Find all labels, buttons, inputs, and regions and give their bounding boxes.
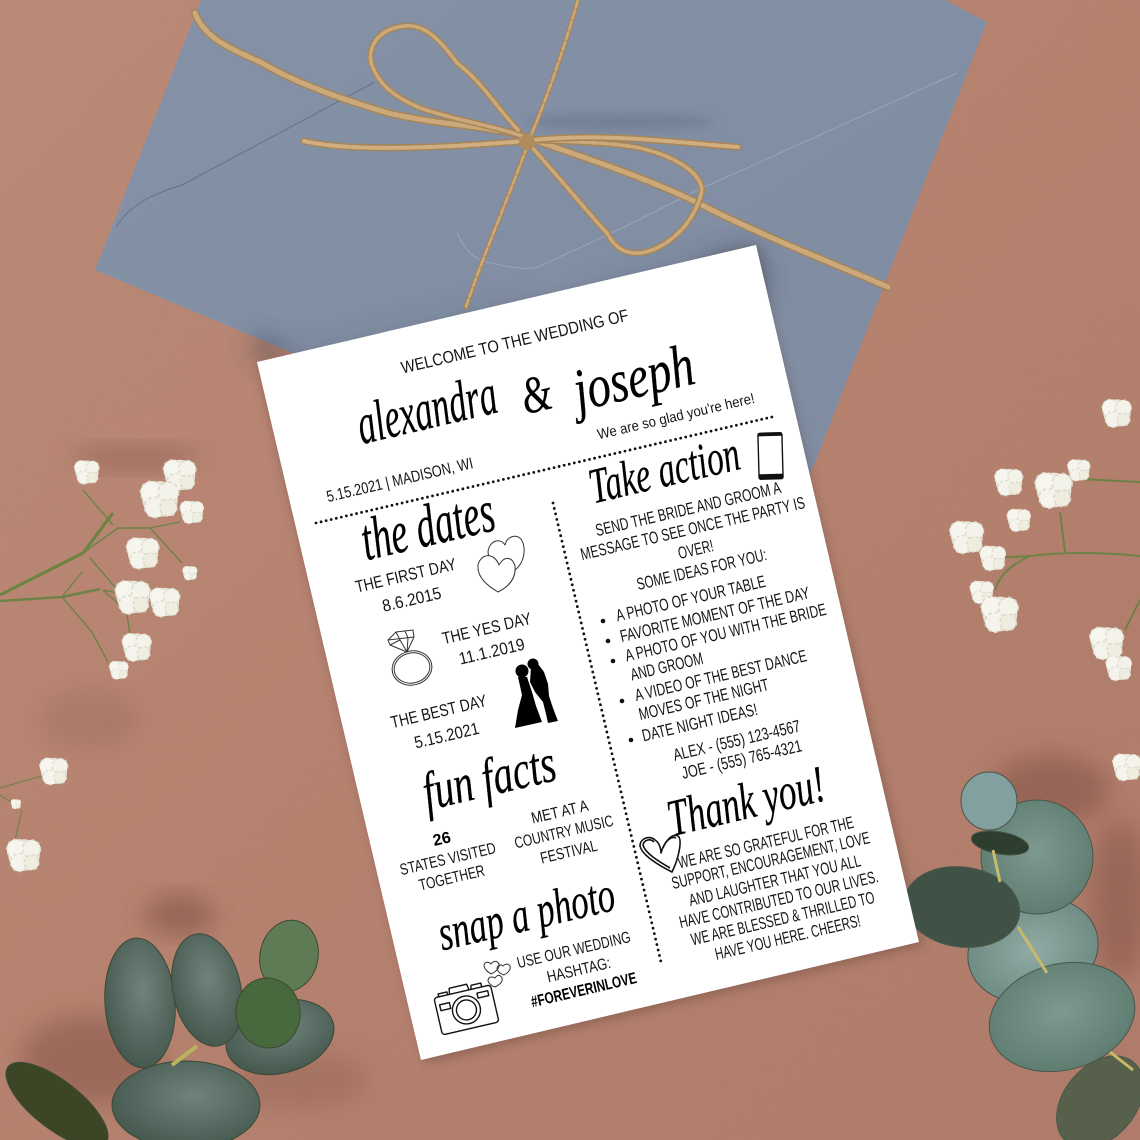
text: yes day: 11.1.2019 [457, 635, 527, 669]
text: best day: THE BEST DAY [389, 691, 489, 732]
list: ideas [601, 572, 828, 745]
text: thanks message [670, 813, 880, 964]
text: thanks message: HAVE YOU HERE. CHEERS! [713, 911, 862, 964]
left eucalyptus [0, 915, 342, 1140]
list: ideas: A VIDEO OF THE BEST DANCE [633, 646, 809, 705]
text: contacts: ALEX - (555) 123-4567 [671, 717, 802, 765]
text: first day [353, 555, 458, 616]
text: instructions: SOME IDEAS FOR YOU: [635, 545, 769, 594]
left baby's breath sprigs [0, 460, 204, 872]
twine: vertical [466, 0, 578, 307]
list: ideas: A PHOTO OF YOUR TABLE [614, 572, 767, 625]
envelope [95, 0, 987, 600]
text: date and location: 5.15.2021 | MADISON, WI [325, 455, 475, 506]
text: first day: THE FIRST DAY [353, 555, 458, 597]
text: instructions: OVER! [676, 536, 715, 563]
list: ideas: DATE NIGHT IDEAS! [640, 700, 759, 745]
heading: names: & [515, 364, 558, 426]
icon: two hearts [478, 536, 524, 592]
text: instructions: MESSAGE TO SEE ONCE THE PARTY IS [579, 493, 807, 564]
text: hashtag: USE OUR WEDDING [516, 929, 632, 972]
flower clusters [7, 460, 204, 872]
text: thanks message: WE ARE BLESSED & THRILLED TO [689, 888, 876, 949]
panel: program card [257, 245, 919, 1060]
icon: kissing couple silhouette [515, 658, 558, 728]
text: best day: 5.15.2021 [412, 719, 481, 752]
twine: knot [519, 134, 535, 150]
text: states visited: 26 [431, 829, 453, 850]
card shadow [257, 249, 924, 1064]
twine: left loop [371, 26, 522, 136]
text: instructions [579, 478, 807, 594]
text: contacts: JOE - (555) 765-4321 [680, 736, 804, 783]
section: snap a photo [432, 866, 639, 1035]
list: ideas: AND GROOM [629, 649, 705, 684]
heading: the dates: the dates [354, 478, 501, 573]
text: thanks message: AND LAUGHTER THAT YOU ALL [687, 851, 863, 910]
text: states visited: TOGETHER [417, 863, 487, 895]
text: thanks message: HAVE CONTRIBUTED TO OUR LIVES. [677, 867, 880, 932]
icon: small hearts [484, 961, 510, 987]
icon: camera [433, 979, 499, 1035]
text: hashtag: #FOREVERINLOVE [529, 970, 639, 1011]
text: met at festival: COUNTRY MUSIC [513, 813, 615, 852]
divider: horizontal dotted line [316, 416, 776, 523]
heading: names [350, 331, 700, 457]
heading: names: joseph [561, 331, 700, 425]
text: met at festival [513, 798, 615, 868]
text: glad you're here: We are so glad you're here! [596, 391, 756, 443]
text: best day [389, 691, 489, 752]
list: ideas: MOVES OF THE NIGHT [637, 675, 771, 724]
heading: take action: Take action [583, 425, 745, 514]
icon: diamond ring [388, 630, 435, 689]
section: the dates [353, 478, 558, 752]
twine bow [195, 0, 888, 307]
text: met at festival: MET AT A [530, 798, 590, 828]
section: take action [579, 425, 828, 783]
heading: snap a photo: snap a photo [432, 866, 620, 961]
twine: bow ends [304, 137, 738, 148]
text: thanks message: SUPPORT, ENCOURAGEMENT, LOVE [670, 828, 872, 893]
sprig stems [990, 478, 1140, 630]
flower clusters [950, 399, 1140, 781]
right baby's breath sprigs [950, 399, 1140, 781]
text: contacts [671, 717, 804, 783]
section: thank you [640, 756, 880, 964]
list: ideas: A PHOTO OF YOU WITH THE BRIDE [623, 600, 828, 665]
text: yes day [440, 609, 533, 669]
text: first day: 8.6.2015 [380, 584, 443, 616]
text: hashtag: HASHTAG: [545, 955, 613, 986]
sprig stems [0, 490, 182, 855]
twine: right loop [530, 140, 702, 253]
text: states visited: STATES VISITED [398, 840, 498, 879]
icon: phone [758, 433, 783, 479]
section: fun facts [398, 733, 615, 895]
list: ideas: FAVORITE MOMENT OF THE DAY [618, 583, 811, 646]
text: met at festival: FESTIVAL [539, 838, 599, 868]
divider: vertical dotted line [553, 503, 661, 962]
text: instructions: SEND THE BRIDE AND GROOM A [594, 478, 783, 540]
text: hashtag [516, 929, 639, 1011]
text: yes day: THE YES DAY [440, 609, 533, 648]
heading: welcome: WELCOME TO THE WEDDING OF [399, 306, 630, 377]
icon: sketched heart [640, 835, 680, 872]
text: states visited [398, 829, 498, 895]
heading: names: alexandra [350, 361, 503, 457]
heading: fun facts: fun facts [416, 733, 561, 822]
text: thanks message: WE ARE SO GRATEFUL FOR THE [676, 813, 856, 872]
right eucalyptus [899, 772, 1140, 1140]
heading: thank you: Thank you! [662, 756, 831, 848]
twine: main diagonal [195, 13, 888, 287]
